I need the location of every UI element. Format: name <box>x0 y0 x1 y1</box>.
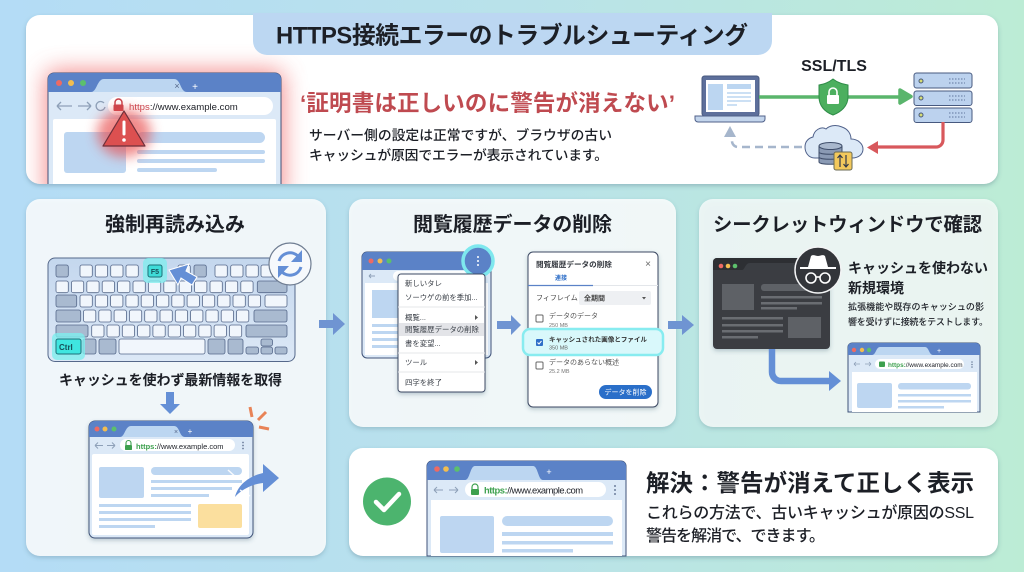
browser with menu button <box>362 246 493 358</box>
browser: refreshed page: https://www.example.com <box>136 442 224 451</box>
browser: refreshed page: + <box>188 427 193 436</box>
browser: resolved page <box>427 461 626 556</box>
problem description: キャッシュが原因でエラーが表示されています。 <box>309 147 608 163</box>
menu button highlight <box>463 246 493 276</box>
browser menu: 四字を終了 <box>405 378 442 387</box>
heading: hard reload: 強制再読み込み <box>105 213 245 236</box>
browser with certificate warning: × <box>174 81 180 91</box>
arrow: to F5 key <box>169 264 197 285</box>
title banner <box>253 13 772 55</box>
icon: refresh <box>269 243 311 285</box>
SSL/TLS label: SSL/TLS <box>801 58 867 75</box>
browser menu <box>398 274 485 392</box>
browser: refreshed page <box>89 421 253 538</box>
dialog: clear browsing data: × <box>645 259 651 270</box>
dialog: clear browsing data: 25.2 MB <box>549 369 570 375</box>
browser: secure result <box>848 343 980 412</box>
key highlight: Ctrl: Ctrl <box>59 343 73 352</box>
title banner: HTTPS接続エラーのトラブルシューティング <box>276 22 748 50</box>
icon: green check <box>363 478 411 526</box>
panel: solution <box>349 448 998 556</box>
highlighted option: cached images and files: キャッシュされた画像とファイル <box>549 334 648 344</box>
browser: refreshed page: × <box>174 429 178 436</box>
arrow: menu to dialog <box>497 315 521 335</box>
panel: problem overview <box>26 15 998 205</box>
browser menu: 概覧... <box>405 313 426 322</box>
highlighted option: cached images and files: 350 MB <box>549 346 568 352</box>
dialog: clear browsing data: データを削除 <box>604 388 646 396</box>
icon: shield with lock <box>819 79 848 115</box>
panel: step 3 incognito window <box>699 199 998 427</box>
subheading: fresh environment: キャッシュを使わない <box>848 260 988 276</box>
description: incognito: 拡張機能や既存のキャッシュの影 <box>848 301 984 312</box>
browser: resolved page: + <box>546 467 552 477</box>
keyboard <box>48 258 295 362</box>
arrow: cached response <box>867 122 943 154</box>
icon: incognito <box>795 247 841 293</box>
dialog: clear browsing data: 閲覧履歴データの削除 <box>536 259 612 269</box>
highlighted option: cached images and files <box>523 329 663 355</box>
arrow: step 1 to step 2 <box>319 313 345 335</box>
browser menu: 新しいタレ <box>405 279 442 288</box>
key highlight: Ctrl <box>52 333 85 360</box>
problem description: サーバー側の設定は正常ですが、ブラウザの古い <box>309 127 612 143</box>
icon: laptop <box>695 76 765 122</box>
arrow: down <box>160 392 180 414</box>
browser menu: 書を変望... <box>405 339 441 348</box>
description: incognito: 響を受けずに接続をテストします。 <box>848 316 988 327</box>
browser: resolved page: https://www.example.com <box>484 484 583 496</box>
browser menu: ソーウゲの前を季加... <box>405 293 478 302</box>
panel: step 1 hard reload <box>26 199 326 556</box>
dark incognito browser <box>713 258 830 349</box>
description: resolved: 警告を解消で、できます。 <box>646 526 825 545</box>
browser with certificate warning: + <box>192 82 198 93</box>
panel: step 2 clear browsing data <box>349 199 676 427</box>
icon: cloud cache <box>805 126 863 170</box>
dialog: clear browsing data: 全期間 <box>584 294 605 302</box>
problem heading: ‘証明書は正しいのに警告が消えない’ <box>300 90 675 116</box>
arrow: stale path back to browser <box>724 126 802 147</box>
dialog: clear browsing data: 250 MB <box>549 323 568 329</box>
browser menu: ツール <box>405 358 428 367</box>
dialog: clear browsing data: 連接 <box>555 274 567 282</box>
icon: server stack <box>914 73 972 122</box>
problem description <box>309 127 612 163</box>
key highlight: F5 <box>143 258 167 283</box>
dialog: clear browsing data: データのデータ <box>549 311 598 320</box>
dialog: clear browsing data: データのあらない概述 <box>549 358 619 366</box>
icon: sparks <box>250 407 269 429</box>
subheading: fresh environment: 新規環境 <box>848 280 904 296</box>
browser menu: 閲覧履歴データの削除 <box>405 325 480 334</box>
dialog: clear browsing data <box>523 252 663 407</box>
browser: secure result: https://www.example.com <box>888 362 963 369</box>
description: resolved: これらの方法で、古いキャッシュが原因のSSL <box>646 503 974 522</box>
heading: clear browsing data: 閲覧履歴データの削除 <box>413 212 612 236</box>
arrow: secure connection <box>759 90 911 103</box>
description: resolved <box>646 503 974 545</box>
arrow: step 2 to step 3 <box>668 315 694 335</box>
key highlight: F5: F5 <box>151 269 159 276</box>
browser with certificate warning <box>46 71 283 205</box>
heading: resolved: 解決：警告が消えて正しく表示 <box>646 469 974 496</box>
subheading: fresh environment <box>848 260 988 296</box>
browser with certificate warning: https://www.example.com <box>129 102 238 113</box>
caption: bypass cache: キャッシュを使わず最新情報を取得 <box>59 372 282 388</box>
diagram: SSL/TLS connection <box>695 58 972 170</box>
browser: secure result: + <box>937 348 941 355</box>
heading: incognito window: シークレットウィンドウで確認 <box>713 214 982 236</box>
description: incognito <box>848 301 988 327</box>
arrow: loading fresh content <box>228 464 279 500</box>
icon: warning triangle <box>97 109 151 157</box>
dialog: clear browsing data: フィフレイム <box>536 294 578 302</box>
arrow: incognito to normal browser <box>772 349 841 391</box>
